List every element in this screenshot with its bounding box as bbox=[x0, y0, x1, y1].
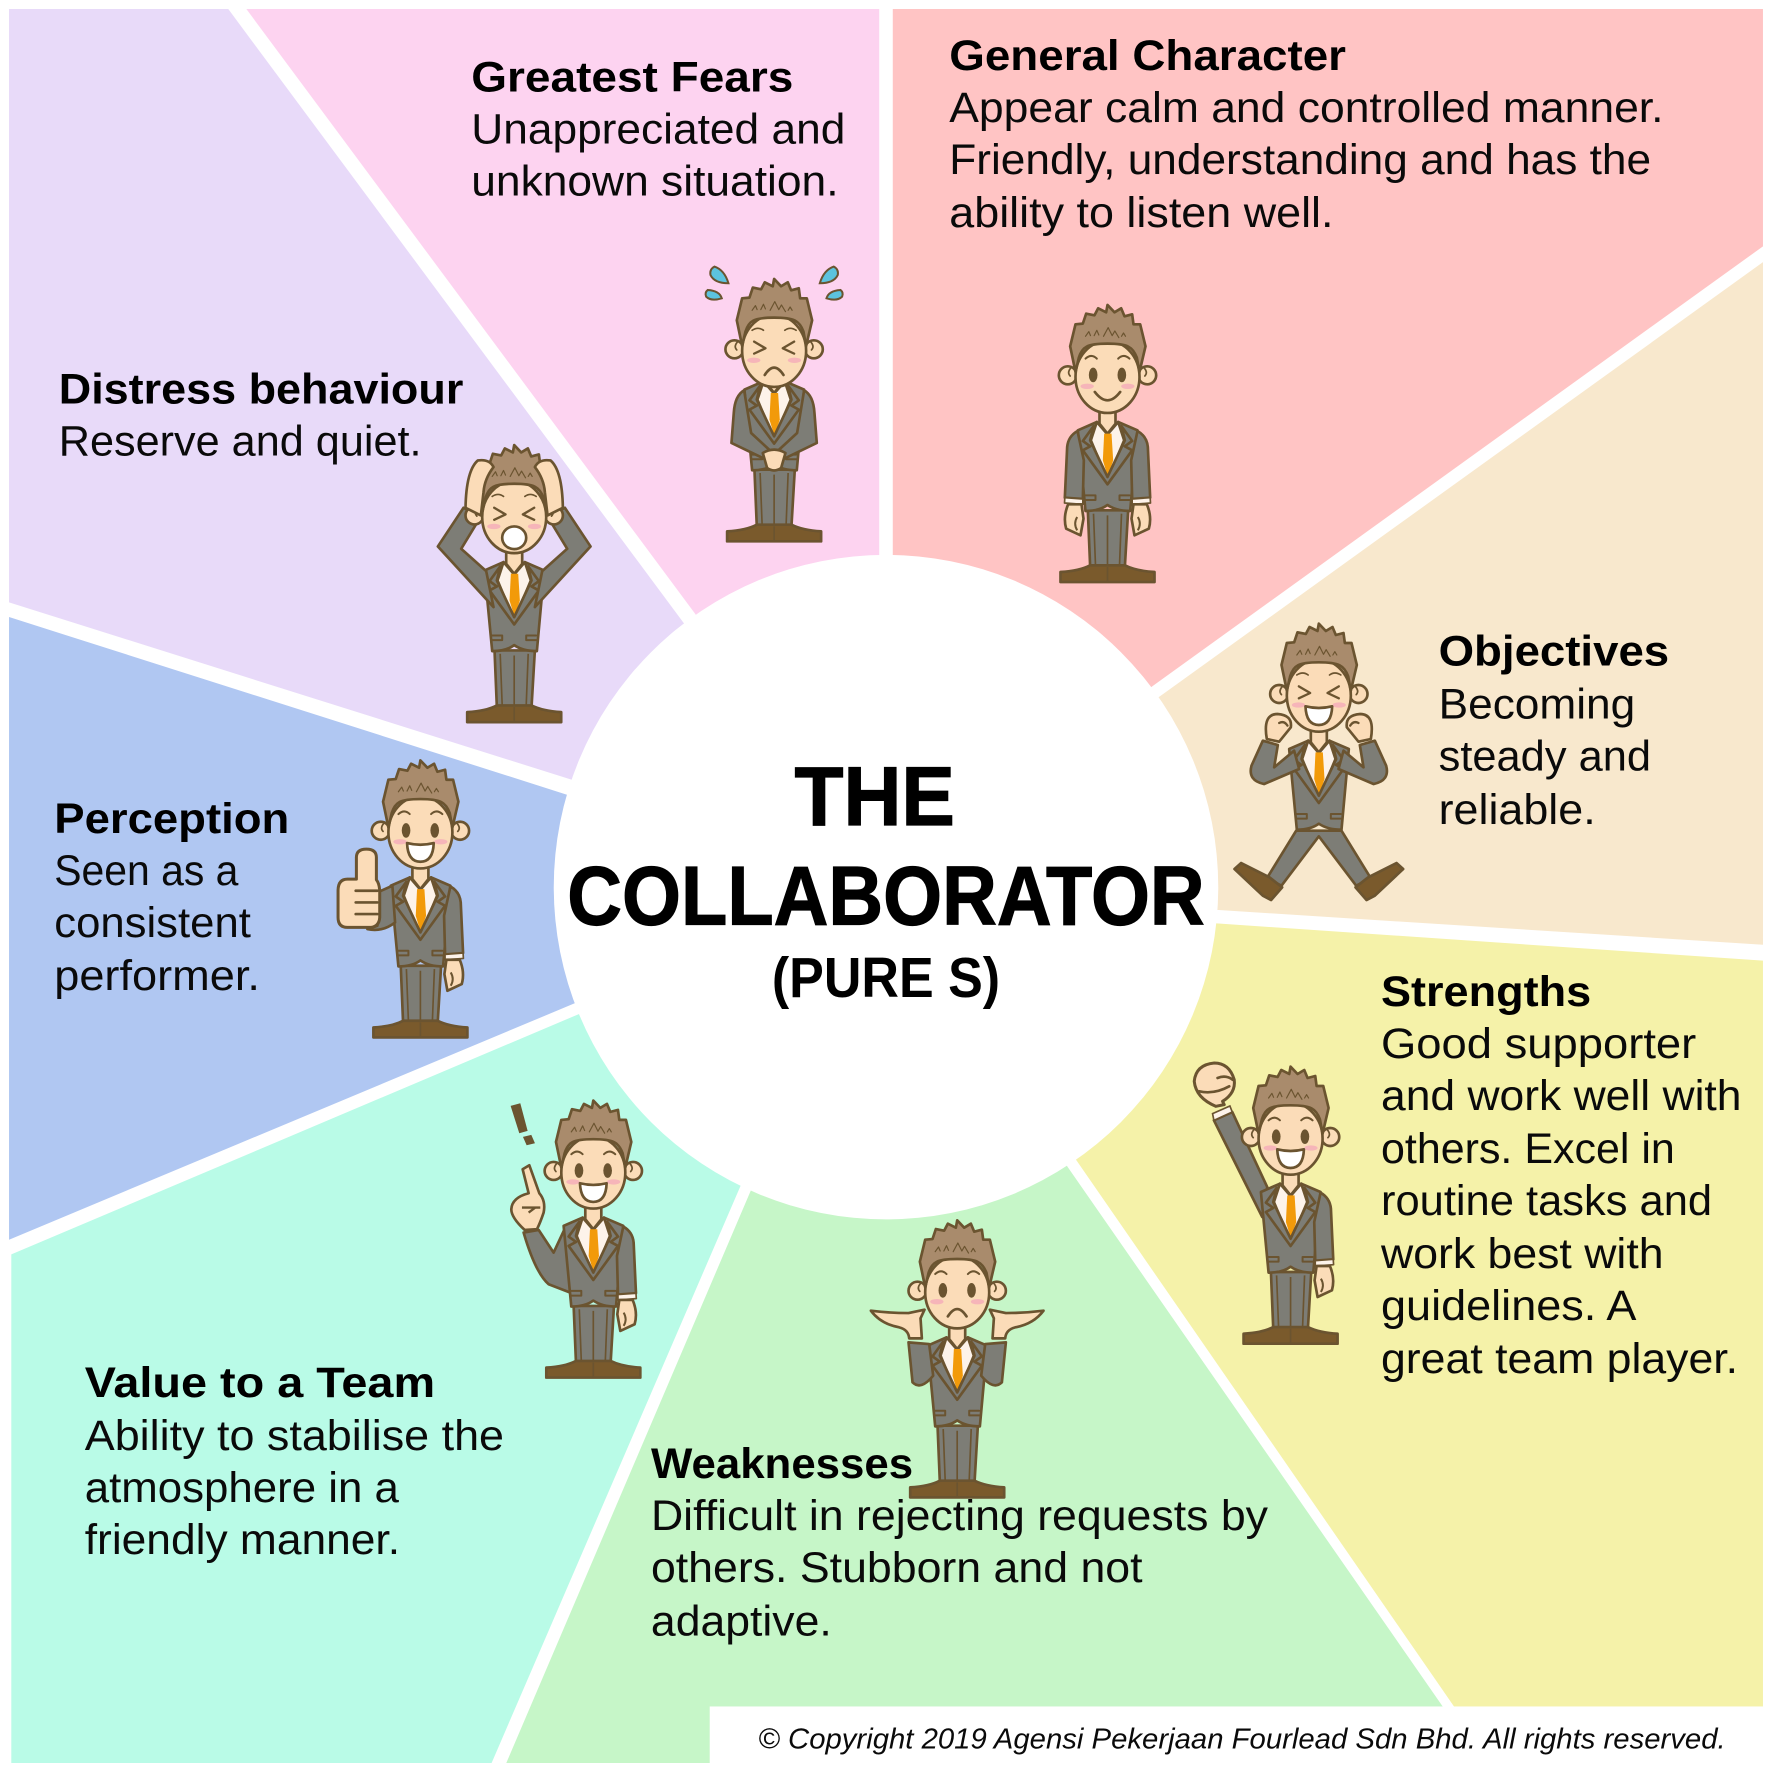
copyright notice: © Copyright 2019 Agensi Pekerjaan Fourlead Sdn Bhd. All rights reserved. bbox=[758, 1722, 1726, 1754]
text block: objectives: Becoming bbox=[1439, 681, 1635, 729]
icon: general character man smiling bbox=[1059, 305, 1156, 582]
panel: strengths wedge bbox=[886, 887, 1763, 1709]
text block: general character: Friendly, understanding and has the bbox=[949, 136, 1651, 184]
text block: value to a team bbox=[85, 1359, 504, 1564]
text block: greatest fears: Unappreciated and bbox=[471, 106, 845, 154]
icon: distress man holding head bbox=[438, 445, 591, 722]
text block: strengths bbox=[1380, 968, 1741, 1383]
text block: perception: performer. bbox=[54, 952, 260, 1000]
text block: strengths: great team player. bbox=[1381, 1335, 1738, 1383]
copyright strip background bbox=[710, 1706, 1772, 1772]
panel: distress behaviour wedge bbox=[9, 9, 886, 887]
panel: objectives wedge bbox=[886, 262, 1763, 945]
text block: greatest fears bbox=[471, 54, 845, 206]
text block: greatest fears: unknown situation. bbox=[471, 158, 839, 206]
text block: objectives: steady and bbox=[1439, 733, 1651, 781]
text block: objectives bbox=[1439, 628, 1669, 834]
text block: general character: Appear calm and controlled manner. bbox=[949, 84, 1664, 132]
text block: strengths: and work well with bbox=[1381, 1072, 1741, 1120]
text block: weaknesses: adaptive. bbox=[651, 1597, 832, 1645]
title bbox=[567, 749, 1205, 1009]
text block: value to a team: friendly manner. bbox=[85, 1516, 400, 1564]
center circle bbox=[554, 555, 1218, 1219]
text block: strengths: others. Excel in bbox=[1381, 1125, 1675, 1173]
text block: perception bbox=[54, 795, 289, 1000]
text block: distress behaviour: Distress behaviour bbox=[59, 365, 464, 413]
text block: strengths: Strengths bbox=[1381, 968, 1591, 1016]
text block: greatest fears: Greatest Fears bbox=[471, 54, 793, 102]
text block: perception: consistent bbox=[54, 899, 251, 947]
text block: strengths: guidelines. A bbox=[1381, 1282, 1637, 1330]
title: COLLABORATOR bbox=[567, 848, 1205, 942]
text block: weaknesses: others. Stubborn and not bbox=[651, 1544, 1143, 1592]
text block: value to a team: Value to a Team bbox=[85, 1359, 435, 1407]
text block: value to a team: Ability to stabilise the bbox=[85, 1412, 504, 1460]
icon: weaknesses man shrugging bbox=[871, 1220, 1044, 1497]
icon: strengths man raising fist bbox=[1194, 1063, 1339, 1344]
text block: weaknesses bbox=[651, 1440, 1269, 1645]
icon: value to a team man pointing up bbox=[511, 1101, 642, 1378]
text block: weaknesses: Weaknesses bbox=[651, 1440, 913, 1488]
text block: distress behaviour: Reserve and quiet. bbox=[59, 417, 422, 465]
panel: value to a team wedge bbox=[11, 887, 886, 1763]
title: (PURE S) bbox=[772, 946, 1000, 1009]
text block: perception: Perception bbox=[54, 795, 289, 843]
text block: general character bbox=[949, 32, 1664, 237]
text block: objectives: reliable. bbox=[1439, 786, 1596, 834]
panel: perception wedge bbox=[9, 617, 886, 1240]
text block: strengths: routine tasks and bbox=[1381, 1177, 1712, 1225]
text block: objectives: Objectives bbox=[1439, 628, 1669, 676]
icon: perception man thumbs up bbox=[338, 760, 469, 1037]
text block: perception: Seen as a bbox=[54, 847, 239, 895]
text block: general character: General Character bbox=[949, 32, 1346, 80]
text block: general character: ability to listen well. bbox=[949, 189, 1334, 237]
text block: strengths: Good supporter bbox=[1381, 1020, 1696, 1068]
text block: distress behaviour bbox=[59, 365, 464, 465]
panel: weaknesses wedge bbox=[506, 887, 1444, 1763]
title: THE bbox=[794, 749, 955, 843]
icon: greatest fears man bowing with sweat drops bbox=[706, 267, 843, 541]
icon: objectives man jumping with fists bbox=[1234, 624, 1403, 900]
text block: value to a team: atmosphere in a bbox=[85, 1464, 399, 1512]
panel: general character wedge bbox=[893, 9, 1763, 887]
panel: greatest fears wedge bbox=[246, 9, 879, 887]
text block: weaknesses: Difficult in rejecting requests by bbox=[651, 1492, 1269, 1540]
text block: strengths: work best with bbox=[1380, 1230, 1664, 1278]
